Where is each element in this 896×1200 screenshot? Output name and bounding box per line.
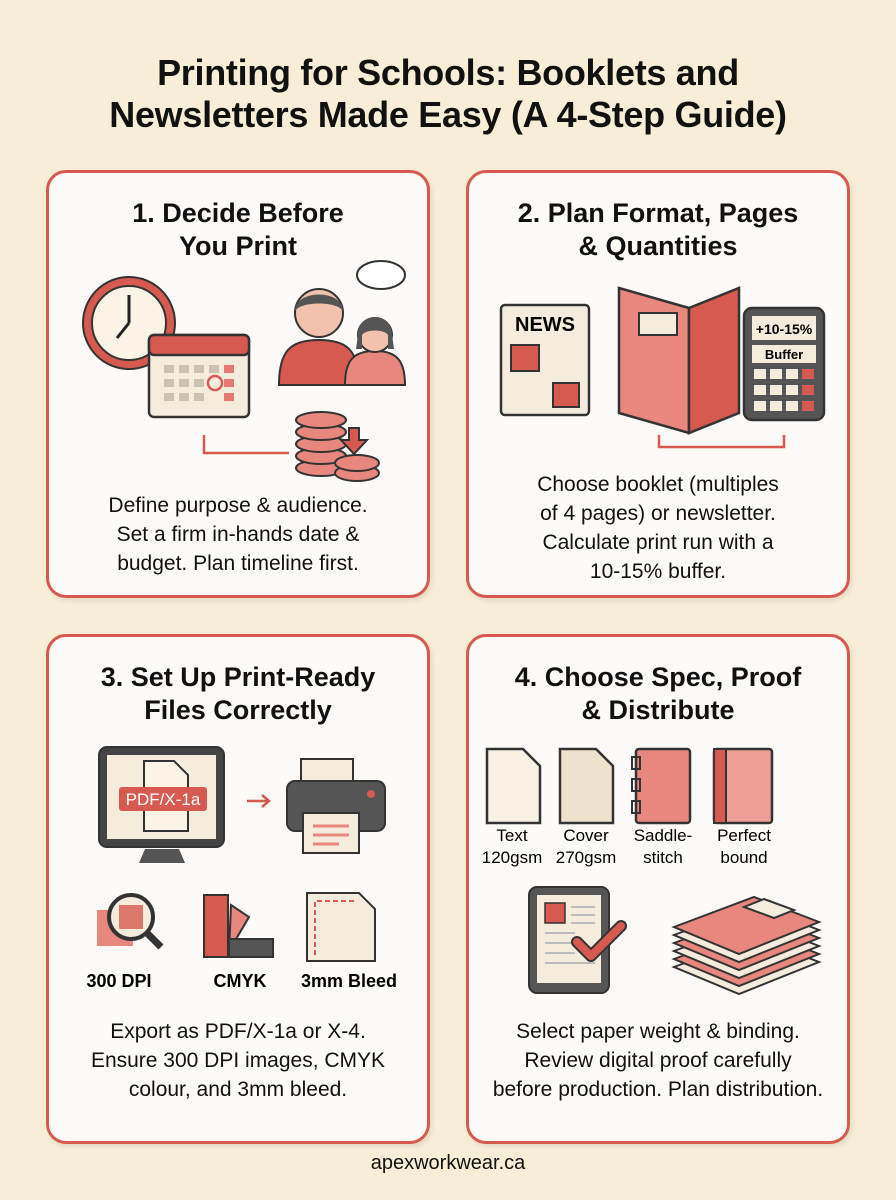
icon: calculator bbox=[744, 308, 824, 420]
icon: CMYK: CMYK bbox=[214, 971, 266, 991]
text step 4: Select paper weight & binding. bbox=[516, 1020, 800, 1043]
text step 4: Review digital proof carefully bbox=[524, 1049, 792, 1072]
text step 2: of 4 pages) or newsletter. bbox=[540, 502, 776, 525]
arrow bbox=[247, 795, 269, 807]
text step 2: Choose booklet (multiples bbox=[537, 473, 779, 496]
text step 1: Set a firm in-hands date & bbox=[117, 523, 359, 546]
icon: stack of booklets bbox=[674, 897, 819, 994]
heading 2: 2. Plan Format, Pages bbox=[518, 198, 798, 228]
icon: paper cover: 270gsm bbox=[556, 848, 616, 867]
panel: step 4 bbox=[466, 634, 850, 1144]
icon: monitor PDF: PDF/X-1a bbox=[126, 790, 201, 809]
heading 2: & Quantities bbox=[578, 231, 738, 261]
icon: booklet bbox=[619, 288, 739, 433]
text step 4: before production. Plan distribution. bbox=[493, 1078, 823, 1101]
icon: calendar bbox=[149, 335, 249, 417]
icon: perfect bound: Perfect bbox=[717, 826, 771, 845]
icon: tablet proof bbox=[529, 887, 621, 993]
icon: bleed bbox=[301, 893, 397, 991]
icon: saddle stitch: Saddle- bbox=[634, 826, 692, 845]
icon: CMYK bbox=[204, 895, 273, 991]
panel: step 1 bbox=[46, 170, 430, 598]
icon: coins bbox=[296, 412, 379, 481]
panel: step 3 bbox=[46, 634, 430, 1144]
text step 3: Export as PDF/X-1a or X-4. bbox=[110, 1020, 366, 1043]
heading 1: 1. Decide Before bbox=[132, 198, 344, 228]
heading 4 bbox=[515, 662, 802, 725]
text step 2: Calculate print run with a bbox=[542, 531, 774, 554]
icon: paper cover: Cover bbox=[563, 826, 609, 845]
heading 1 bbox=[132, 198, 344, 261]
heading 2 bbox=[518, 198, 798, 261]
icon: saddle stitch bbox=[632, 749, 692, 867]
heading 1: You Print bbox=[179, 231, 297, 261]
icon: paper cover bbox=[556, 749, 616, 867]
text step 2 bbox=[537, 473, 779, 583]
icon: perfect bound: bound bbox=[720, 848, 768, 867]
icon: paper text: 120gsm bbox=[482, 848, 542, 867]
footer: apexworkwear.ca bbox=[371, 1152, 525, 1174]
icon: bleed: 3mm Bleed bbox=[301, 971, 397, 991]
icon: perfect bound bbox=[714, 749, 772, 867]
heading 4: 4. Choose Spec, Proof bbox=[515, 662, 801, 692]
icon: newspaper bbox=[501, 305, 589, 415]
icon: saddle stitch: stitch bbox=[643, 848, 683, 867]
icon: calculator: +10-15% bbox=[756, 321, 813, 337]
heading 3: 3. Set Up Print-Ready bbox=[101, 662, 375, 692]
title: Printing for Schools: Booklets and bbox=[157, 52, 739, 93]
icon: people bbox=[279, 261, 405, 385]
icon: paper text: Text bbox=[496, 826, 528, 845]
icon: 300 DPI: 300 DPI bbox=[86, 971, 152, 991]
arrow connector bbox=[204, 435, 289, 453]
icon: paper text bbox=[482, 749, 542, 867]
panel: step 2 bbox=[466, 170, 850, 598]
text step 1: budget. Plan timeline first. bbox=[117, 552, 359, 575]
text step 3: colour, and 3mm bleed. bbox=[129, 1078, 347, 1101]
icon: newspaper: NEWS bbox=[515, 314, 575, 336]
icon: clock bbox=[83, 277, 175, 369]
text step 2: 10-15% buffer. bbox=[590, 560, 726, 583]
text step 3 bbox=[91, 1020, 385, 1101]
icons step 1 bbox=[82, 260, 406, 482]
icon: monitor PDF bbox=[99, 747, 224, 863]
title bbox=[109, 52, 787, 135]
heading 3 bbox=[101, 662, 376, 725]
title: Newsletters Made Easy (A 4-Step Guide) bbox=[109, 94, 787, 135]
icon: 300 DPI bbox=[86, 895, 161, 991]
heading 3: Files Correctly bbox=[144, 695, 332, 725]
icon: printer bbox=[287, 759, 385, 853]
heading 4: & Distribute bbox=[581, 695, 734, 725]
text step 4 bbox=[493, 1020, 823, 1101]
icon: calculator: Buffer bbox=[765, 347, 803, 362]
text step 1: Define purpose & audience. bbox=[108, 494, 368, 517]
text step 1 bbox=[108, 494, 368, 575]
text step 3: Ensure 300 DPI images, CMYK bbox=[91, 1049, 385, 1072]
